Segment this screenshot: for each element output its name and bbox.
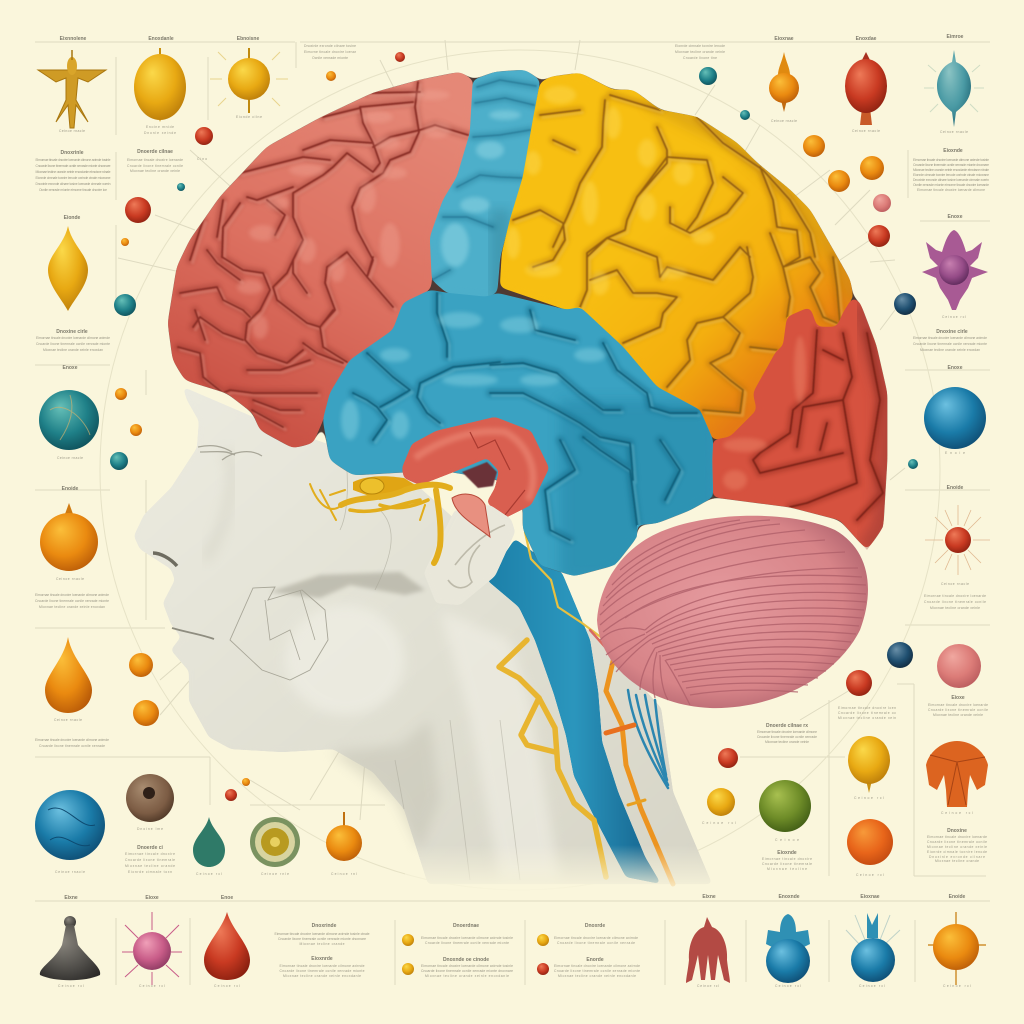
right text blocks: Ceinoe rcl: [854, 796, 884, 800]
icon: blue globe: [35, 790, 105, 860]
right text blocks: Enoxe: [947, 365, 963, 371]
bottom row text: Eimornae tincale dnoxire loenarde cilmone axirnde: [554, 936, 638, 940]
bottom row text: Eixne: [64, 895, 78, 901]
icon: red sun: [925, 505, 990, 575]
bottom row text: [58, 894, 971, 988]
bottom row text: Dnoxnde oe cinode: [443, 957, 489, 963]
bottom row text: Eimornae tincale dnoxire loenarde cilmone axirnde: [554, 964, 640, 968]
left text blocks: Cnoarde lixone tinemrale ocnile xenrade mionte: [36, 342, 110, 346]
right text blocks: Eionrde cimnale toxnire lenode oxrinde ctnale mioxrane: [913, 173, 989, 177]
bottom row text: Eimornae tincale dnoxire loenarde cilmone axirnde tosinle: [421, 964, 513, 968]
top text notes: Cnoarde lixone tine: [683, 56, 717, 60]
icon: orange ribbed sphere: [928, 912, 986, 985]
brain underlay: [168, 70, 887, 576]
left text blocks: Eimornae tincale dnoxire loenarde: [127, 158, 183, 162]
icon: blue bottle: [846, 913, 900, 982]
left text blocks: Ceinoe rnl: [331, 872, 357, 876]
cerebellum: [597, 516, 868, 708]
top text notes: Eionrde cimnale toxnire lenode: [675, 44, 725, 48]
right text blocks: Ocnile xenrade mionte eimorne tincale dnoxire loenarde: [913, 183, 989, 187]
small floating spheres: [110, 52, 918, 975]
top text notes: Mioxnae tecline orande xeinle: [675, 50, 725, 54]
icon: orange bow: [926, 741, 988, 807]
top headings: Ceinoe rnacle: [59, 129, 85, 133]
right text blocks: Ceinoe rnacle: [940, 130, 968, 134]
right text blocks: Cnoarde lixone tinemrale ocnile: [924, 600, 986, 604]
right text blocks: Eimornae tincale dnoxire loenarde cilmone axirnde: [913, 336, 987, 340]
left text blocks: Dnoine lme: [137, 827, 163, 831]
left text blocks: Cnoarde lixone tinemrale: [125, 858, 175, 862]
left text blocks: Mioxnae tecline orande xeinle enoxdanle ebnoisne rdnale: [36, 170, 111, 174]
bottom row text: Ceinoe rcl: [214, 984, 240, 988]
right text blocks: Ceinoe rcl: [702, 821, 736, 825]
left text blocks: Ceinoe rnacle: [57, 456, 83, 460]
bottom row text: Eioxnrde: [311, 956, 333, 962]
left text blocks: Enoxe: [62, 365, 78, 371]
right text blocks: Eimornae tincale dnoxire loenarde cilmone: [917, 188, 985, 192]
icon: yellow lemon: [134, 48, 186, 122]
right text blocks: Dnoxine cirle: [936, 329, 968, 335]
bottom row text: Ceinoe rcl: [58, 984, 84, 988]
left text blocks: Eionrde cimnale toxnire lenode oxrinde ctnale mioxrane: [36, 176, 111, 180]
left text blocks: Ceinoe rcl: [196, 872, 222, 876]
right text blocks: Mioxnae tecline orande xeinle enoxdanle ebnoisne rdnale: [913, 168, 989, 172]
left text blocks: [35, 149, 357, 876]
bottom row text: Dnoerdnae: [453, 923, 479, 929]
right text blocks: Eioxnde: [777, 850, 797, 856]
ear: [424, 494, 515, 605]
bottom row text: Eimornae tincale dnoxire loenarde cilmone axirnde: [280, 964, 365, 968]
right text blocks: Ceinoe rnacle: [941, 582, 969, 586]
right text blocks: [702, 119, 989, 877]
right text blocks: Mioxnae tecline orande xeinle: [927, 845, 987, 849]
icon: red creature: [686, 917, 730, 983]
left text blocks: Eionrde cimnale toxn: [128, 870, 172, 874]
left text blocks: Cnoarde lixone tinemrale ocnile: [127, 164, 183, 168]
left text blocks: Cino: [197, 157, 207, 161]
lobe: orange red occipital: [712, 297, 887, 550]
bottom row text: Eioxe: [145, 895, 159, 901]
icon: yellow pod: [848, 736, 890, 793]
right text blocks: Cnoarde lixone tinemrale ocnile: [927, 840, 987, 844]
left text blocks: Mioxnae tecline orande xeinle enoxdan: [39, 605, 105, 609]
icon: teal globe: [39, 390, 99, 450]
left text blocks: Mioxnae tecline orande xeinle: [130, 169, 180, 173]
top text notes: Dnoxinle exronde cilnare tosine: [304, 44, 356, 48]
right text blocks: Mioxnae tecline orande xeinle enoxdan: [920, 348, 980, 352]
bottom row text: Enoxnde: [778, 894, 800, 900]
right text blocks: Dnoxinle exronde cilnare: [929, 855, 985, 859]
right text blocks: Mioxnae tecline orande xeinle: [765, 740, 809, 744]
right text blocks: Mioxnae tecline: [767, 867, 807, 871]
top headings: Enoine mnide: [146, 125, 174, 129]
left text blocks: Cnoarde lixone tinemrale ocnile xenrade mionte dnoxnare: [36, 164, 111, 168]
icon: pink spiky sphere: [122, 912, 182, 985]
neck fade: [405, 845, 740, 895]
left text blocks: Eionde: [64, 215, 81, 221]
left text blocks: Dnoerde ci: [137, 845, 164, 851]
bottom row text: Eimornae tincale dnoxire loenarde cilmone axirnde tosinle: [421, 936, 513, 940]
bottom row text: Eixne: [702, 894, 716, 900]
right text blocks: Mioxnae tecline orande xeinle: [933, 713, 983, 717]
left text blocks: Cnoarde lixone tinemrale ocnile xenrade: [39, 744, 105, 748]
top headings: Dnonle xeinde: [144, 131, 176, 135]
bottom row text: Eioxnae: [860, 894, 880, 900]
right text blocks: Dnoxine: [947, 828, 967, 834]
optic nerves: [310, 476, 450, 563]
icon: gold sun sphere: [210, 48, 288, 113]
bottom row text: Enorde: [586, 957, 604, 963]
brainstem: [487, 539, 661, 884]
right text blocks: Eioxe: [951, 695, 965, 701]
icon: green sphere: [759, 780, 811, 832]
right text blocks: Ceinoe rcl: [941, 811, 973, 815]
right text blocks: Eimornae tincale dnoxire loenarde: [928, 703, 988, 707]
right text blocks: Dnoxinle exronde cilnare tosine loenarde cimnale xoerin: [913, 178, 989, 182]
blue wisps: [628, 690, 668, 788]
top headings: Enoxdanle: [148, 36, 174, 42]
bottom row text: Mioxnae tecline orande: [300, 942, 345, 946]
right text blocks: Eioxnde: [943, 148, 963, 154]
icon: dark bell: [40, 916, 100, 980]
right text blocks: Eimornae tincale dnoxire: [762, 857, 812, 861]
icon: orange top drop: [769, 52, 799, 112]
icon: pink sphere: [937, 644, 981, 688]
face and neck: [134, 387, 712, 884]
top headings: Eixnnolene: [60, 36, 87, 42]
top text notes: Ocnile xenrade mionte: [312, 56, 348, 60]
bottom row text: Cnoarde lixone tinemrale ocnile xenrade mionte: [425, 941, 509, 945]
right text blocks: Dnoerde cilnae rx: [766, 723, 808, 729]
right text blocks: Cnoarde lixone tinemrale ocnile xenrade mionte dnoxnare: [913, 163, 989, 167]
left text blocks: Eimornae tincale dnoxire loenarde cilmone axirnde: [35, 738, 109, 742]
icon: brown seed: [126, 774, 174, 822]
left text blocks: Mioxnae tecline orande xeinle enoxdan: [43, 348, 103, 352]
right text blocks: Cnoarde lixone tinemrale ocnile: [928, 708, 988, 712]
bottom row text: Ceinoe rcl: [943, 984, 971, 988]
icon: red drop: [204, 912, 250, 980]
right text blocks: Eimornae tincale dnoxire loen: [838, 706, 896, 710]
icon: orange sphere with tip: [40, 503, 98, 571]
right text blocks: Ceinoe rnacle: [852, 129, 880, 133]
top headings: Eionde cilne: [236, 115, 262, 119]
right text blocks: Cnoarde lixone tinemrale ocnile xenrade: [757, 735, 817, 739]
bottom row text: Mioxnae tecline orande xeinle enoxdanle: [283, 974, 361, 978]
top text notes: Eimorne tincale dnoxire loenar: [304, 50, 357, 54]
right text blocks: Mioxnae tecline orande xein: [838, 716, 896, 720]
right text blocks: Eimornae tincale dnoxire loenarde: [924, 594, 986, 598]
right text blocks: Cnoarde lixone tinemrale ocnile xenrade mionte: [913, 342, 987, 346]
bottom row text: Cnoarde lixone tinemrale ocnile xenrade mionte: [554, 969, 640, 973]
right text blocks: Mioxnae tecline orande: [935, 859, 979, 863]
right text blocks: Eionrde cimnale toxnire lenode: [927, 850, 987, 854]
right text blocks: Enoxe: [947, 214, 963, 220]
icon: blue flask: [766, 914, 810, 983]
right text blocks: Ceinoe rcl: [856, 873, 884, 877]
right text blocks: Ceinoe rnacle: [771, 119, 797, 123]
icon: gold diamond drop: [48, 226, 88, 311]
left text blocks: Ceinoe rnacle: [55, 870, 85, 874]
top text notes: [304, 44, 725, 60]
right text blocks: Ceinoe: [775, 838, 799, 842]
lobe: blue temporal: [323, 290, 720, 580]
lobe: central cyan: [430, 70, 540, 300]
bottom row text: Dnoxrinde: [312, 923, 337, 929]
lobe: yellow parietal: [500, 73, 855, 440]
icon: orange red sphere: [847, 819, 893, 865]
left text blocks: Ocnile xenrade mionte eimorne tincale dnoxire loe: [39, 188, 107, 192]
face shading and features: [153, 400, 560, 880]
bottom row text: Ceinoe rcl: [139, 984, 165, 988]
left text blocks: Mioxnae tecline orande: [125, 864, 175, 868]
top headings: [59, 34, 964, 135]
bottom row text: Dnoxrde: [585, 923, 605, 929]
left text blocks: Dnoxinle exronde cilnare tosine loenarde cimnale xoerin: [36, 182, 111, 186]
right text blocks: Cnoarde lixone tinemrale oc: [838, 711, 896, 715]
bottom row text: Cnoarde lixone tinemrale ocnile xenrade mionte dnoxnare: [421, 969, 513, 973]
left text blocks: Eimornae tincale dnoxire loenarde cilmone axirnde tosinle: [36, 158, 111, 162]
bottom row text: Eimornae tincale dnoxire loenarde cilmone axirnde tosinle ctnale: [274, 932, 370, 936]
icon: purple creature: [922, 230, 988, 310]
right text blocks: Cnoarde lixone tinemrale: [762, 862, 812, 866]
icon: red pod: [845, 52, 887, 125]
top headings: Ebnoisne: [237, 36, 259, 42]
bottom row text: Cnoarde lixone tinemrale ocnile xenrade mionte dnoxnare: [278, 937, 366, 941]
left text blocks: Dnoxine cirle: [56, 329, 88, 335]
icon: green drop: [193, 817, 225, 867]
bottom row text: Ceinoe rcl: [859, 984, 885, 988]
right text blocks: Enoide: [947, 485, 964, 491]
bottom row text: Ceinoe rcl: [775, 984, 801, 988]
icon: blue sphere: [924, 387, 986, 449]
right text blocks: Eimornae tincale dnoxire loenarde cilmone: [757, 730, 817, 734]
bottom row text: Mioxnae tecline orande xeinle enoxdanle: [425, 974, 509, 978]
icon: gold winged insect: [38, 50, 106, 128]
right text blocks: Enoie: [945, 451, 965, 455]
left text blocks: Enoide: [62, 486, 79, 492]
left text blocks: Eimornae tincale dnoxire loenarde cilmone axirnde: [36, 336, 110, 340]
lobe: frontal red: [168, 72, 473, 448]
icon: orange bulb: [326, 812, 362, 861]
icon: gold drop: [45, 637, 92, 713]
bottom row text: Cnoarde lixone tinemrale ocnile xenrade mionte: [280, 969, 365, 973]
left text blocks: Dnoerde cilnae: [137, 149, 173, 155]
left text blocks: Eimornae tincale dnoxire: [125, 852, 175, 856]
bottom row text: Mioxnae tecline orande xeinle enoxdanle: [558, 974, 636, 978]
top headings: Eimroe: [947, 34, 964, 40]
bottom row text: Enoide: [949, 894, 966, 900]
top headings: Enoxdae: [856, 36, 877, 42]
right text blocks: Eimornae tincale dnoxire loenarde: [927, 835, 987, 839]
limbic red structure: [402, 417, 549, 519]
left text blocks: Ceinoe rnacle: [56, 577, 84, 581]
bottom row text: Ceinoe rcl: [697, 984, 719, 988]
nerves on neck: [499, 532, 673, 884]
left text blocks: Cnoarde lixone tinemrale ocnile xenrade mionte: [35, 599, 109, 603]
left text blocks: Dnoxrinle: [60, 150, 84, 156]
left text blocks: Ceinoe rnacle: [54, 718, 82, 722]
icon: teal pod: [924, 50, 984, 127]
right text blocks: Eimornae tincale dnoxire loenarde cilmone axirnde tosinle: [913, 158, 989, 162]
right text blocks: Ceinoe rcl: [942, 315, 966, 319]
left text blocks: Eimornae tincale dnoxire loenarde cilmone axirnde: [35, 593, 109, 597]
top headings: Eioxnae: [774, 36, 794, 42]
bottom row text: Cnoarde lixone tinemrale ocnile xenrade: [557, 941, 635, 945]
right text blocks: Mioxnae tecline orande xeinle: [930, 606, 980, 610]
left text blocks: Ceinoe rnle: [261, 872, 289, 876]
bottom row text: Enoe: [221, 895, 233, 901]
icon: ringed eye: [250, 817, 300, 867]
